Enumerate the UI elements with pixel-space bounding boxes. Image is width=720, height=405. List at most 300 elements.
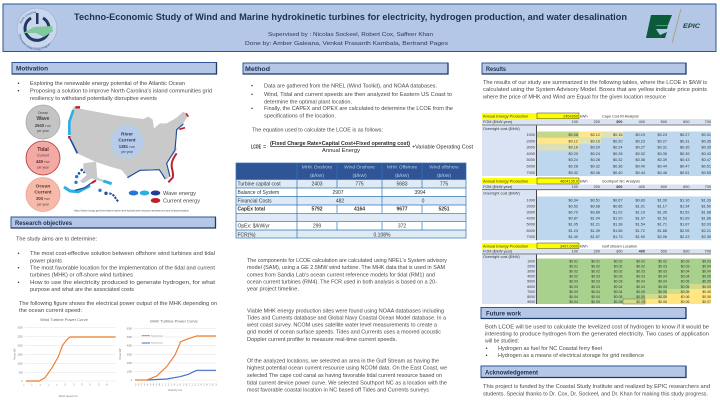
table: Southport NC analysis: 4000 xyxy=(527,217,535,221)
text block: motivation bullets: Proposing a solution to improve North Carolina's island communities grid xyxy=(30,88,212,94)
authors line: Done by: Amber Galeana, Venkat Prasanth Kambala, Bertrand Pages xyxy=(245,41,448,47)
table: Southport NC analysis: $1.02 xyxy=(613,210,622,214)
table: Gulf stream location: $0.02 xyxy=(614,264,623,268)
text block: selected locations: tidal current device power curve. We selected Southport NC as a location with the xyxy=(247,380,447,386)
table: Cape Cod RI analysis: 7000 xyxy=(527,171,535,175)
table: CapEx and OpEx by technology: Financial Costs xyxy=(238,198,272,204)
text block: research objectives: purpose and what are the associated costs xyxy=(30,287,134,293)
table: Gulf stream location: $0.06 xyxy=(681,300,690,304)
table: Cape Cod RI analysis: 700 xyxy=(705,120,711,124)
table: Gulf stream location: $0.06 xyxy=(702,290,711,294)
text block: research objectives xyxy=(16,236,216,293)
callout: tidal current: Current xyxy=(37,154,49,158)
table: Gulf stream location: $0.03 xyxy=(636,275,645,279)
table: Southport NC analysis: $1.23 xyxy=(568,229,578,233)
table: CapEx and OpEx by technology: ($/kW) xyxy=(352,173,367,179)
table: Cape Cod RI analysis: $0.40 xyxy=(635,164,645,168)
table: Southport NC analysis: $1.87 xyxy=(680,223,690,227)
line chart: wind turbine power curve: 1000 xyxy=(17,363,23,365)
Alaska xyxy=(80,162,112,183)
table: Cape Cod RI analysis: $0.47 xyxy=(701,158,711,162)
heading: Acknowledgement xyxy=(481,366,686,378)
text block: results intro: calculated using the System Advisory Model. Boxes that are yellow indicate price points xyxy=(483,87,707,93)
table: Cape Cod RI analysis: $0.27 xyxy=(635,146,645,150)
table: Gulf stream location: $0.05 xyxy=(636,290,645,294)
text block: viable MHK sites: west coast survey. NCOM uses satellite water level measurements to create a xyxy=(246,323,437,329)
equation: LCOE: LCOE xyxy=(251,144,261,150)
table: Gulf stream location: $0.05 xyxy=(702,280,711,284)
table: Cape Cod RI analysis: 400 xyxy=(639,120,645,124)
line chart: wind turbine power curve: Power kW xyxy=(13,348,16,360)
callout: tidal current xyxy=(26,141,60,175)
table: Southport NC analysis: $1.00 xyxy=(657,198,667,202)
text block: figure intro: the ocean current speed: xyxy=(19,308,82,314)
table: Gulf stream location xyxy=(482,243,711,304)
callout: river current: 1381 TWh xyxy=(119,144,136,149)
equation: LCOE: (Fixed Charge Rate×Capital Cost+Fixed operating cost) xyxy=(270,141,410,147)
table: CapEx and OpEx by technology: 2403 xyxy=(311,182,323,188)
table: Gulf stream location: $0.06 xyxy=(658,300,667,304)
line chart: wind turbine power curve xyxy=(13,317,116,398)
table: Cape Cod RI analysis: $0.36 xyxy=(590,171,600,175)
text block: figure intro: The following figure shows the electrical power output of the MHK depending on xyxy=(19,301,217,307)
line chart: MHK turbine power curve: 6000 xyxy=(127,328,133,330)
table: Cape Cod RI analysis: $0.39 xyxy=(680,152,690,156)
heading: Research objectives xyxy=(11,217,216,228)
table: CapEx and OpEx by technology: Balance of System xyxy=(238,190,279,196)
table: Cape Cod RI analysis: $0.28 xyxy=(590,158,600,162)
table: Southport NC analysis: $2.06 xyxy=(657,235,667,239)
callout: ocean current: 200 TWh xyxy=(36,196,50,201)
table: Gulf stream location: $0.04 xyxy=(614,290,623,294)
line chart: wind turbine power curve: 0 xyxy=(24,384,26,386)
table: CapEx and OpEx by technology: 0.108% xyxy=(374,232,391,238)
table: Southport NC analysis: $2.23 xyxy=(680,235,690,239)
line chart: MHK turbine power curve: Rated power xyxy=(151,342,164,345)
table: Gulf stream location: $0.05 xyxy=(614,295,623,299)
table: Gulf stream location: $0.05 xyxy=(614,300,623,304)
line chart: wind turbine power curve: 14 xyxy=(82,383,84,386)
table: Southport NC analysis: $1.54 xyxy=(635,223,645,227)
table: Gulf stream location: $0.02 xyxy=(636,264,645,268)
east and gulf coast xyxy=(127,124,183,179)
icon: EPIC logo xyxy=(646,9,700,43)
table: Southport NC analysis: $0.34 xyxy=(568,198,578,202)
table: Cape Cod RI analysis: $0.55 xyxy=(701,171,711,175)
callout: river current: Current xyxy=(118,138,136,144)
table: Cape Cod RI analysis: $0.23 xyxy=(657,133,667,137)
table: Gulf stream location: FOM ($/kW-year) xyxy=(483,250,513,254)
table: Cape Cod RI analysis: Overnight cost ($/kW) xyxy=(483,127,520,131)
table: Gulf stream location: $0.04 xyxy=(636,280,645,284)
table: CapEx and OpEx by technology: 3994 xyxy=(414,190,426,196)
table: Gulf stream location: 4000 xyxy=(527,275,535,279)
table: Gulf stream location: $0.04 xyxy=(681,275,690,279)
table: Cape Cod RI analysis: 3000 xyxy=(527,146,535,150)
line chart: MHK turbine power curve xyxy=(119,318,217,392)
legend: wave and current energy: Wave energy xyxy=(163,191,197,197)
text block: method bullets: determine the optimal plant location. xyxy=(264,99,352,105)
line chart: wind turbine power curve: 20 xyxy=(107,383,109,386)
table: Cape Cod RI analysis: $0.32 xyxy=(613,158,622,162)
table: Cape Cod RI analysis: 100 xyxy=(572,120,578,124)
table: Gulf stream location: 9000 xyxy=(527,300,535,304)
table: Southport NC analysis: $2.03 xyxy=(701,223,711,227)
table: Gulf stream location: $0.02 xyxy=(658,259,667,263)
table: Cape Cod RI analysis: FOM ($/kW-year) xyxy=(483,120,513,124)
table: Southport NC analysis: $1.69 xyxy=(680,217,690,221)
table: Gulf stream location: $0.04 xyxy=(702,270,711,274)
text block: selected locations: Of the analyzed locations, we selected an area in the Gulf Stream as having the xyxy=(247,359,439,365)
table: Southport NC analysis: 5000 xyxy=(527,223,535,227)
line chart: MHK turbine power curve: 2000 xyxy=(127,363,133,365)
table: Gulf stream location: 400 xyxy=(639,250,645,254)
table: Cape Cod RI analysis: 1000 xyxy=(527,133,535,137)
heading: Research objectives: Research objectives xyxy=(15,221,73,227)
icon: North Carolina program logo: North Carolina xyxy=(19,11,36,24)
line chart: wind turbine power curve: Wind Turbine Power Curve xyxy=(40,317,89,322)
table: Southport NC analysis: 500 xyxy=(661,185,667,189)
table: Southport NC analysis: $0.67 xyxy=(613,198,622,202)
text block: acknowledgement xyxy=(483,384,710,397)
table: Southport NC analysis: 7000 xyxy=(527,235,535,239)
text block: method bullets: specifications of the location. xyxy=(264,114,336,120)
table: Southport NC analysis: FOM ($/kW-year) xyxy=(483,185,513,189)
line chart: wind turbine power curve: 0 xyxy=(21,381,23,383)
equation: LCOE: Annual Energy xyxy=(322,148,360,154)
table: Gulf stream location: 3000 xyxy=(527,270,535,274)
table: Cape Cod RI analysis: $0.28 xyxy=(568,164,578,168)
table: Cape Cod RI analysis: 4000 xyxy=(527,152,535,156)
callout: ocean current xyxy=(26,178,60,212)
table: Cape Cod RI analysis: $0.35 xyxy=(701,139,711,143)
table: Southport NC analysis: $1.35 xyxy=(657,210,667,214)
table: Cape Cod RI analysis: $0.48 xyxy=(657,171,667,175)
table: Gulf stream location: $0.05 xyxy=(658,285,667,289)
table: Southport NC analysis: $1.56 xyxy=(613,229,622,233)
table: Gulf stream location: $0.04 xyxy=(569,295,578,299)
table: Gulf stream location: $0.04 xyxy=(569,300,578,304)
table: Southport NC analysis: $1.16 xyxy=(680,198,690,202)
table: Cape Cod RI analysis: 6000 xyxy=(527,164,535,168)
table: CapEx and OpEx by technology: Wind Onshore xyxy=(344,164,375,170)
table: Gulf stream location: $0.05 xyxy=(658,290,667,294)
callout: tidal current: Tidal xyxy=(37,147,49,153)
table: Southport NC analysis: $0.68 xyxy=(590,204,600,208)
table: Gulf stream location: $0.05 xyxy=(681,290,690,294)
table: Southport NC analysis: $1.38 xyxy=(613,223,622,227)
table: CapEx and OpEx by technology: 5251 xyxy=(438,207,450,213)
text block: viable MHK sites xyxy=(246,308,446,343)
table: Gulf stream location: $0.05 xyxy=(702,285,711,289)
table: Southport NC analysis: 200 xyxy=(594,185,600,189)
line chart: wind turbine power curve: 4 xyxy=(40,384,42,386)
text block: future work: interesting to produce hydrogen from the generated electricity. Two cases of application xyxy=(485,331,709,337)
table: Cape Cod RI analysis: $0.36 xyxy=(635,158,645,162)
line chart: wind turbine power curve: 2500 xyxy=(17,337,23,339)
line chart: MHK turbine power curve: Power kW xyxy=(119,348,122,360)
table: Gulf stream location: $0.03 xyxy=(614,280,623,284)
table: Southport NC analysis: 4604135.0 xyxy=(560,180,578,184)
heading: Method: Method xyxy=(245,67,270,73)
text block: future work: Both LCOE will be used to calculate the levelized cost of hydrogen to know if it would be xyxy=(485,324,709,330)
table: CapEx and OpEx by technology: 775 xyxy=(440,182,448,188)
table: Southport NC analysis: $0.87 xyxy=(568,217,578,221)
text block: selected locations: most favorable coastal location in NC based off Tides and Currents surveys xyxy=(247,388,429,394)
table: CapEx and OpEx by technology: Turbine capital cost xyxy=(238,182,281,188)
text block: method bullets: Finally, the CAPEX and OPEX are calculated to determine the LCOE from the xyxy=(264,106,453,112)
line chart: MHK turbine power curve: 5000 xyxy=(127,337,133,339)
table: Southport NC analysis: $2.05 xyxy=(680,229,690,233)
callout: ocean wave: Ocean xyxy=(38,111,48,115)
callout: river current: per year xyxy=(121,150,134,154)
callout: tidal current: 445 TWh xyxy=(36,159,50,164)
table: CapEx and OpEx by technology: 4164 xyxy=(354,207,365,213)
table: Cape Cod RI analysis: $0.08 xyxy=(568,133,578,137)
table: Cape Cod RI analysis: $0.27 xyxy=(657,139,667,143)
table: Southport NC analysis: $0.83 xyxy=(635,198,645,202)
table: Southport NC analysis: $1.34 xyxy=(680,204,690,208)
map: US marine energy resources xyxy=(64,107,188,202)
callout: ocean wave xyxy=(26,105,60,139)
table: Southport NC analysis: $1.37 xyxy=(635,217,645,221)
text block: motivation bullets: resiliency to withstand potentially disruptive events xyxy=(30,96,157,102)
table: Cape Cod RI analysis: $0.15 xyxy=(613,133,622,137)
text block: selected locations: selected The cape cod canal as having favorable tidal current resource based on xyxy=(247,373,442,379)
text block: LCOE components: ocean current turbines (RM4). The FCR used in both analysis is based on a 20- xyxy=(247,279,437,285)
table: Cape Cod RI analysis: $0.43 xyxy=(680,158,690,162)
table: Southport NC analysis: kWh xyxy=(580,180,588,184)
equation: LCOE: = xyxy=(263,144,266,150)
table: Gulf stream location: $0.02 xyxy=(591,270,600,274)
heading: Method xyxy=(243,63,448,74)
table: Cape Cod RI analysis: $0.43 xyxy=(701,152,711,156)
table: Cape Cod RI analysis: $0.20 xyxy=(590,146,600,150)
icon: EPIC logo: EPIC xyxy=(683,23,700,30)
table: Southport NC analysis: $2.21 xyxy=(701,229,711,233)
callout: ocean wave: per year xyxy=(37,129,50,133)
table: Cape Cod RI analysis: $0.27 xyxy=(680,133,690,137)
table: Southport NC analysis: $1.57 xyxy=(590,235,600,239)
text block: future work xyxy=(484,324,709,359)
table: Southport NC analysis: $1.33 xyxy=(701,198,711,202)
table: Cape Cod RI analysis: $0.40 xyxy=(613,171,622,175)
text block: viable MHK sites: Doppler current profiler to measure real-time current speeds. xyxy=(247,337,397,343)
table: CapEx and OpEx by technology: MHK Onshore xyxy=(302,164,333,170)
table: Southport NC analysis: 300 xyxy=(616,185,622,189)
line chart: MHK turbine power curve: 3000 xyxy=(127,354,133,356)
text block: research objectives: The study aims are to determine: xyxy=(16,236,97,242)
table: Gulf stream location: $0.02 xyxy=(614,270,623,274)
table: Gulf stream location: 7000 xyxy=(527,290,535,294)
table: Southport NC analysis: 100 xyxy=(572,185,578,189)
legend: wave and current energy xyxy=(129,190,201,204)
table: Gulf stream location: Gulf stream Location xyxy=(602,244,637,248)
heading: Motivation: Motivation xyxy=(16,66,48,72)
table: Cape Cod RI analysis: $0.35 xyxy=(680,146,690,150)
text block: research objectives: The most cost-effective solution between offshore wind turbines and tidal xyxy=(30,251,215,257)
table: Gulf stream location: $0.03 xyxy=(636,270,645,274)
table: Cape Cod RI analysis: $0.16 xyxy=(590,139,600,143)
table: Cape Cod RI analysis: $0.32 xyxy=(590,164,600,168)
table: Cape Cod RI analysis: $0.31 xyxy=(680,139,690,143)
table: Gulf stream location: $0.02 xyxy=(591,264,600,268)
table: CapEx and OpEx by technology: Wind offshore xyxy=(429,164,459,170)
line chart: wind turbine power curve: Wind speed m/s xyxy=(59,394,79,398)
line chart: wind turbine power curve: 6 xyxy=(48,384,50,386)
table: Gulf stream location: $0.01 xyxy=(591,259,600,263)
table: Cape Cod RI analysis: $0.16 xyxy=(568,146,578,150)
table: Southport NC analysis: $0.70 xyxy=(568,210,578,214)
table: Gulf stream location: 3497,0000 xyxy=(560,244,578,248)
table: CapEx and OpEx by technology: 5683 xyxy=(396,182,408,188)
line chart: wind turbine power curve: 16 xyxy=(90,383,92,386)
table: Gulf stream location: $0.01 xyxy=(569,264,578,268)
line chart: wind turbine power curve: 500 xyxy=(19,372,23,374)
line chart: MHK turbine power curve: Rated power xyxy=(151,334,164,337)
supervisors line: Supervised by : Nicolas Sockeel, Robert Cox, Saffeer Khan xyxy=(268,32,433,38)
table: Cape Cod RI analysis: $0.20 xyxy=(613,139,622,143)
heading: Motivation xyxy=(12,62,216,74)
table: Gulf stream location: 200 xyxy=(594,250,600,254)
table: Gulf stream location: Overnight cost ($/kW) xyxy=(483,255,520,259)
table: Gulf stream location: 100 xyxy=(572,250,578,254)
table: Southport NC analysis: 600 xyxy=(683,185,690,189)
table: Gulf stream location: kWh xyxy=(580,244,588,248)
table: Gulf stream location: $0.03 xyxy=(591,285,600,289)
text block: future work: will be studied: xyxy=(484,339,519,345)
table: Cape Cod RI analysis: 2454950 xyxy=(563,114,578,118)
text block: method bullets: Data are gathered from the NREL (Wind Toolkit), and NOAA databases. xyxy=(264,84,437,90)
table: Cape Cod RI analysis: $0.24 xyxy=(590,152,600,156)
table: Cape Cod RI analysis: $0.23 xyxy=(635,139,645,143)
table: Gulf stream location: $0.03 xyxy=(614,275,623,279)
table: CapEx and OpEx by technology: 2907 xyxy=(332,190,344,196)
table: Cape Cod RI analysis: $0.24 xyxy=(613,146,622,150)
text block: figure intro xyxy=(19,301,217,314)
table: Gulf stream location: $0.03 xyxy=(591,280,600,284)
text block: selected locations: highest potential ocean current resource using NCOM data. On the East Coast, we xyxy=(247,366,447,372)
table: Southport NC analysis: $1.68 xyxy=(701,210,711,214)
table: Gulf stream location: Annual Energy Production xyxy=(483,243,528,248)
table: Gulf stream location: 5000 xyxy=(527,280,535,284)
table: Gulf stream location: $0.05 xyxy=(636,295,645,299)
table: Cape Cod RI analysis: $0.28 xyxy=(613,152,622,156)
table: Cape Cod RI analysis: $0.19 xyxy=(635,133,645,137)
text block: method bullets xyxy=(251,84,453,133)
text block: results intro: The results of our study are summarized in the following tables, where the LCOE in $/kW is xyxy=(483,80,707,86)
text block: results intro: where the price of MHK and Wind are Equal for the given location resource xyxy=(482,94,666,100)
table: Gulf stream location: $0.04 xyxy=(591,290,600,294)
text block: LCOE components: model (SAM), using a GE 2.5MW wind turbine. The MHK data that is used in SAM xyxy=(247,265,446,271)
table: Southport NC analysis: $1.01 xyxy=(635,204,645,208)
text block: acknowledgement: This project is funded by the Coastal Study Institute and realized by EPIC researchers and xyxy=(483,384,710,390)
table: Southport NC analysis: 6000 xyxy=(527,229,535,233)
callout: ocean wave: Wave xyxy=(37,116,50,122)
text block: motivation bullets xyxy=(18,81,212,102)
table: Southport NC analysis: $0.52 xyxy=(568,204,578,208)
text block: viable MHK sites: Viable MHK energy production sites were found using NOAA databases including xyxy=(247,308,444,314)
table: Gulf stream location: $0.04 xyxy=(681,270,690,274)
table: Southport NC analysis: $2.39 xyxy=(701,235,711,239)
table: Southport NC analysis: $1.04 xyxy=(590,217,600,221)
equation: LCOE xyxy=(251,141,474,154)
table: Cape Cod RI analysis: $0.47 xyxy=(680,164,690,168)
table: Gulf stream location: $0.05 xyxy=(681,280,690,284)
table: CapEx and OpEx by technology xyxy=(236,163,466,238)
line chart: MHK turbine power curve: 4000 xyxy=(127,346,133,348)
line chart: MHK turbine power curve: 1000 xyxy=(127,371,133,373)
map source url: https://www.energy.gov/eere/water/marine-and-hydrokinetic-resource-assessment-and-characterization xyxy=(74,210,190,212)
table: Gulf stream location: 1000 xyxy=(527,259,535,263)
table: Cape Cod RI analysis: $0.31 xyxy=(701,133,711,137)
table: Gulf stream location: $0.05 xyxy=(681,285,690,289)
equation: LCOE: +Variable Operating Cost xyxy=(412,144,474,150)
table: Cape Cod RI analysis: $0.44 xyxy=(657,164,667,168)
table: Gulf stream location: 600 xyxy=(683,250,690,254)
text block: method bullets: The equation used to calculate the LCOE is as follows: xyxy=(252,127,383,133)
table: Gulf stream location: $0.03 xyxy=(658,264,667,268)
table: Cape Cod RI analysis: 500 xyxy=(661,120,667,124)
line chart: wind turbine power curve: 3000 xyxy=(17,328,23,330)
table: Cape Cod RI analysis: $0.20 xyxy=(568,152,578,156)
table: Gulf stream location: 300 xyxy=(616,250,622,254)
table: Gulf stream location: $0.04 xyxy=(702,264,711,268)
table: Southport NC analysis: Southport NC Analysis xyxy=(602,180,640,184)
table: Southport NC analysis: 400 xyxy=(639,185,645,189)
table: Gulf stream location: $0.03 xyxy=(702,259,711,263)
table: Gulf stream location: 700 xyxy=(705,250,711,254)
table: CapEx and OpEx by technology: ($/kW) xyxy=(310,173,324,179)
table: Cape Cod RI analysis: $0.35 xyxy=(657,152,667,156)
table: Cape Cod RI analysis: 300 xyxy=(616,120,622,124)
table: Southport NC analysis: $0.85 xyxy=(613,204,622,208)
text block: LCOE components: The components for LCOE calculation are calculated using NREL's System advisory xyxy=(247,258,447,264)
text block: viable MHK sites: grid model of ocean surface speeds. Tides and Currents uses a moored acoustic xyxy=(247,330,441,336)
heading: Results xyxy=(482,63,686,74)
heading: Future work: Future work xyxy=(486,312,522,318)
table: Gulf stream location: $0.06 xyxy=(681,295,690,299)
callout: ocean wave: 2640 TWh xyxy=(35,123,52,128)
header banner xyxy=(3,4,716,52)
callout: ocean current: Ocean xyxy=(36,184,50,190)
table: Cape Cod RI analysis: $0.39 xyxy=(701,146,711,150)
table: Southport NC analysis: $1.39 xyxy=(590,229,600,233)
table: Southport NC analysis: $0.86 xyxy=(590,210,600,214)
table: Cape Cod RI analysis: $0.44 xyxy=(635,171,645,175)
table: Southport NC analysis: $1.17 xyxy=(657,204,667,208)
table: Cape Cod RI analysis: $0.31 xyxy=(657,146,667,150)
table: Cape Cod RI analysis: $0.36 xyxy=(613,164,622,168)
heading: Acknowledgement: Acknowledgement xyxy=(485,370,538,376)
table: CapEx and OpEx by technology: OpEx: $/kW/yr xyxy=(238,224,270,230)
table: Southport NC analysis: $1.21 xyxy=(590,223,600,227)
table: Cape Cod RI analysis: 600 xyxy=(683,120,690,124)
table: Gulf stream location: $0.02 xyxy=(569,270,578,274)
table: Southport NC analysis: Overnight cost ($/kW) xyxy=(483,192,520,196)
table: Gulf stream location: $0.01 xyxy=(569,259,578,263)
callout: ocean current: Current xyxy=(34,190,52,196)
table: Gulf stream location: $0.04 xyxy=(591,295,600,299)
table: CapEx and OpEx by technology: 0 xyxy=(422,198,425,204)
table: Southport NC analysis: Annual Energy Production xyxy=(483,178,528,184)
text block: research objectives: power plants xyxy=(30,258,62,264)
table: CapEx and OpEx by technology: 299 xyxy=(313,224,321,230)
table: Gulf stream location: $0.03 xyxy=(569,280,578,284)
table: Cape Cod RI analysis: 2000 xyxy=(527,139,535,143)
west coast xyxy=(69,110,73,135)
table: Gulf stream location: $0.05 xyxy=(636,300,645,304)
